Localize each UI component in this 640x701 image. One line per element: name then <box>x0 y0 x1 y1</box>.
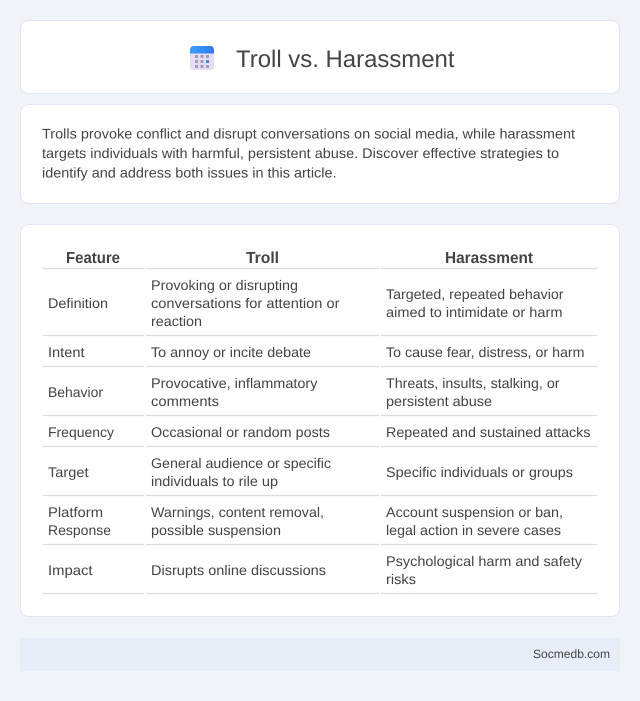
row: intent <box>48 344 584 360</box>
row: platform response: possible suspension <box>151 522 281 538</box>
row: platform response: Account suspension or ban, <box>386 504 563 520</box>
row: definition: conversations for attention or <box>151 295 340 311</box>
row: frequency: Frequency <box>48 424 114 440</box>
row: target: individuals to rile up <box>151 473 278 489</box>
row: definition: Provoking or disrupting <box>151 277 298 293</box>
footer text: Socmedb.com <box>533 647 610 661</box>
row: intent: To annoy or incite debate <box>151 344 311 360</box>
row: definition <box>48 277 564 329</box>
icon: calendar <box>190 46 214 70</box>
intro text: identify and address both issues in this article. <box>42 164 336 180</box>
row: target: General audience or specific <box>151 455 331 471</box>
intro text: Trolls provoke conflict and disrupt conversations on social media, while harassment <box>42 126 575 142</box>
row: platform response: Response <box>48 522 111 538</box>
table header row: Feature <box>66 250 120 267</box>
row: platform response: Platform <box>48 504 103 520</box>
panel: comparison table <box>20 224 620 616</box>
row: impact: Impact <box>48 562 93 578</box>
row: frequency: Occasional or random posts <box>151 424 330 440</box>
header panel <box>20 20 620 94</box>
row: target: Target <box>48 464 89 480</box>
intro text: targets individuals with harmful, persistent abuse. Discover effective strategies to <box>42 145 559 161</box>
row: behavior: comments <box>151 393 219 409</box>
row: frequency: Repeated and sustained attacks <box>386 424 590 440</box>
row: behavior <box>48 375 560 409</box>
table header row <box>66 250 534 267</box>
title: Troll vs. Harassment <box>236 46 455 73</box>
row: behavior: Behavior <box>48 384 103 400</box>
table header row: Harassment <box>445 250 534 267</box>
table header row: Troll <box>246 250 279 267</box>
row: definition: aimed to intimidate or harm <box>386 304 562 320</box>
intro text <box>42 126 575 180</box>
row: behavior: Threats, insults, stalking, or <box>386 375 560 391</box>
row: platform response <box>48 504 563 538</box>
row: impact: Disrupts online discussions <box>151 562 326 578</box>
row: definition: reaction <box>151 313 202 329</box>
row: definition: Definition <box>48 295 108 311</box>
row: impact <box>48 553 582 587</box>
row: behavior: persistent abuse <box>386 393 492 409</box>
row: frequency <box>48 424 590 440</box>
row: definition: Targeted, repeated behavior <box>386 286 564 302</box>
row: behavior: Provocative, inflammatory <box>151 375 318 391</box>
row: impact: Psychological harm and safety <box>386 553 582 569</box>
row: intent: Intent <box>48 344 85 360</box>
row: target <box>48 455 573 489</box>
row: intent: To cause fear, distress, or harm <box>386 344 584 360</box>
footer bar <box>20 638 620 671</box>
row: platform response: legal action in severe cases <box>386 522 561 538</box>
intro panel <box>20 104 620 204</box>
row: impact: risks <box>386 571 416 587</box>
row: target: Specific individuals or groups <box>386 464 573 480</box>
row: platform response: Warnings, content removal, <box>151 504 324 520</box>
